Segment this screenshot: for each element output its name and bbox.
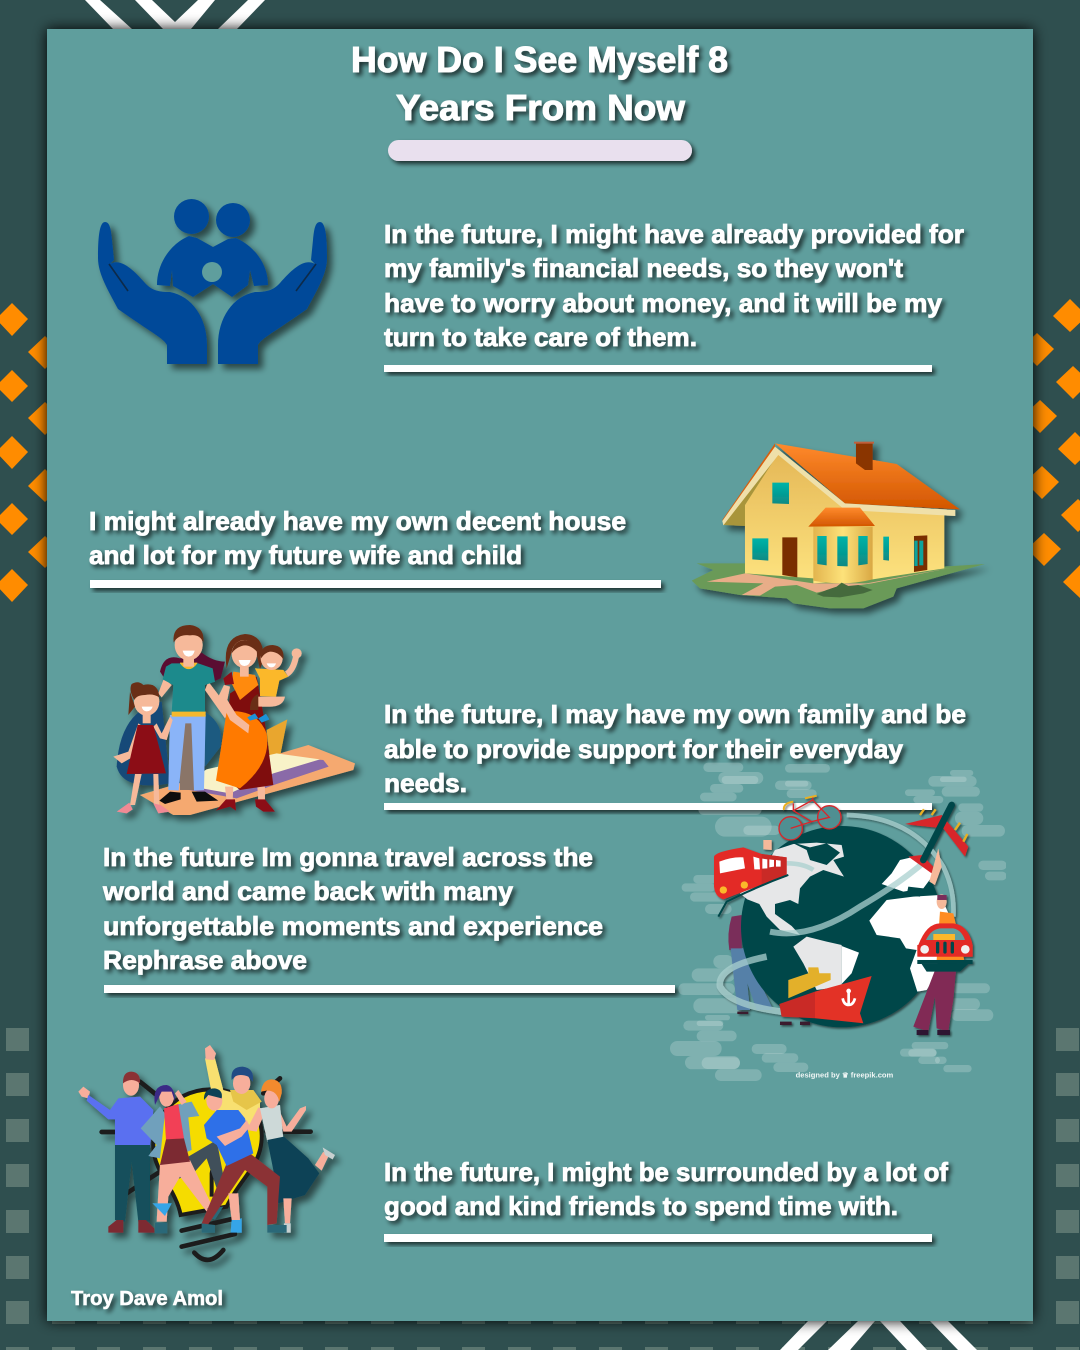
swooshes: [720, 815, 954, 1012]
text block 2: [89, 506, 626, 570]
text block 5: good and kind friends to spend time with.: [384, 1191, 898, 1221]
text block 4: unforgettable moments and experience: [103, 911, 603, 941]
background pattern: squares left: [6, 1028, 29, 1350]
white chevrons top: [85, 0, 265, 29]
orange diamonds left: [0, 303, 62, 602]
woman with orange hair: [247, 1107, 266, 1132]
title: [351, 39, 728, 128]
text block 4: In the future Im gonna travel across the: [103, 842, 593, 872]
illustration: house: [692, 442, 985, 608]
title: Years From Now: [396, 87, 686, 128]
white chevrons bottom: [780, 1321, 977, 1350]
people behind globe: [728, 915, 742, 950]
rule 1: [384, 365, 932, 372]
text block 1: have to worry about money, and it will be my: [384, 288, 943, 318]
background pattern: squares right: [1056, 1028, 1079, 1350]
ship: [788, 967, 831, 998]
rule 3: [384, 803, 932, 810]
train: [714, 847, 787, 899]
freepik credit: designed by ♛ freepik.com: [796, 1071, 893, 1079]
orange diamonds right: [1020, 299, 1080, 598]
text block 4: Rephrase above: [103, 945, 307, 975]
text block 3: [384, 699, 966, 798]
plane: [905, 815, 968, 857]
illustration: family: [113, 625, 355, 815]
illustration: friends: [78, 1045, 335, 1260]
mum: [225, 787, 233, 802]
text block 3: able to provide support for their everyday: [384, 734, 904, 764]
text block 2: I might already have my own decent house: [89, 506, 626, 536]
text block 4: [102, 842, 603, 975]
text block 1: turn to take care of them.: [384, 322, 697, 352]
child: [257, 697, 285, 707]
traveller with car: [929, 848, 942, 885]
text block 2: and lot for my future wife and child: [89, 540, 522, 570]
text block 5: [384, 1157, 948, 1221]
clouds: [670, 763, 1007, 1081]
rule 4: [104, 985, 675, 993]
bicycle: [779, 797, 841, 840]
title underline pill: [388, 140, 692, 161]
man in blue tee: [202, 1153, 280, 1227]
title: How Do I See Myself 8: [351, 39, 728, 80]
rule 5: [384, 1234, 932, 1242]
background pattern: squares bottom: [52, 1301, 1033, 1350]
man in blue sweater: [78, 1087, 90, 1098]
illustration: travel globe: [670, 763, 1007, 1081]
text block 5: In the future, I might be surrounded by a lot of: [384, 1157, 948, 1187]
text block 1: my family's financial needs, so they won't: [384, 253, 903, 283]
icon: hands holding family: [98, 199, 327, 364]
continents: [740, 843, 844, 935]
woman in red: [157, 1160, 213, 1222]
text block 4: world and came back with many: [102, 876, 514, 906]
light bulb: [102, 1078, 311, 1260]
text block 3: In the future, I may have my own family and be: [384, 699, 966, 729]
text block 1: In the future, I might have already provided for: [384, 219, 964, 249]
text block 3: needs.: [384, 768, 467, 798]
yellow hoodie person: [205, 1058, 260, 1130]
text block 1: [384, 219, 964, 352]
rule 2: [90, 580, 661, 588]
dad: [168, 715, 206, 791]
girl: [130, 774, 142, 805]
author name: Troy Dave Amol: [71, 1288, 223, 1310]
